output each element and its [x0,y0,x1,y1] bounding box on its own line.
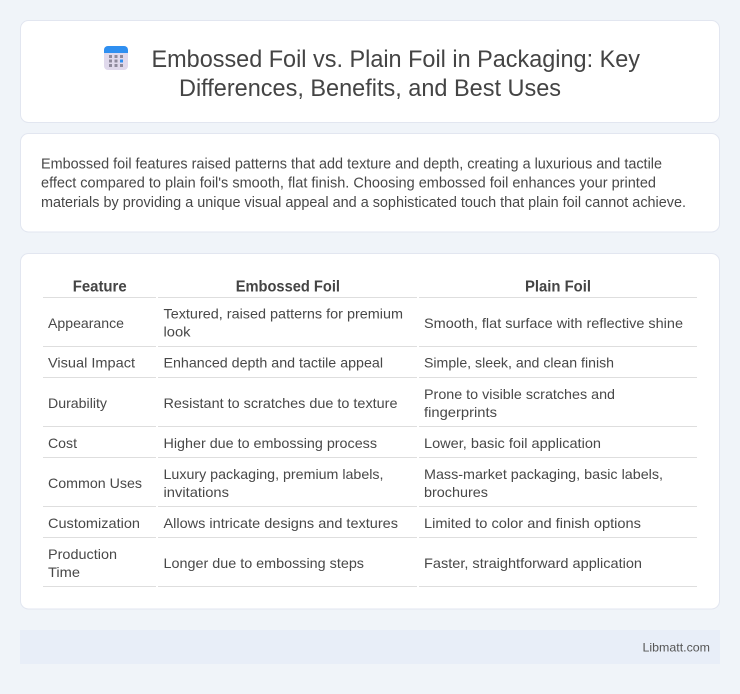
panel: comparison table [20,254,720,609]
row: common uses: invitations [164,484,229,500]
intro text: materials by providing a unique visual appeal and a sophisticated touch that plain foil cannot achieve. [41,195,686,211]
panel: introduction [20,134,720,232]
row: appearance: Appearance [48,315,124,331]
row: common uses: Luxury packaging, premium labels, [164,466,384,482]
row: common uses: Mass-market packaging, basic labels, [424,466,663,482]
row: production time: Time [48,564,80,580]
row: common uses: brochures [424,484,488,500]
row: cost [43,435,697,458]
row: customization: Allows intricate designs and textures [164,515,398,531]
panel: title card [20,20,720,122]
row: production time [43,546,697,587]
intro text [41,156,686,211]
row: appearance: look [164,324,192,340]
row: customization [43,515,697,538]
row: appearance: Textured, raised patterns for premium [164,306,403,322]
row: durability: fingerprints [424,404,497,420]
row: durability [43,386,697,427]
row: production time: Longer due to embossing steps [164,555,364,571]
footer [20,630,720,664]
row: production time: Production [48,546,117,562]
row: cost: Higher due to embossing process [164,435,377,451]
row: appearance: Smooth, flat surface with reflective shine [424,315,683,331]
intro text: Embossed foil features raised patterns that add texture and depth, creating a luxurious and tactile [41,156,662,172]
row: customization: Limited to color and finish options [424,515,641,531]
table header: Plain Foil [525,278,591,296]
footer: Libmatt.com [642,640,710,654]
row: visual impact: Enhanced depth and tactile appeal [164,354,383,370]
table header: Embossed Foil [236,278,340,296]
row: common uses [43,466,697,507]
row: cost: Cost [48,435,77,451]
table header: Feature [73,278,127,296]
table header [43,278,697,298]
row: visual impact [43,354,697,378]
intro text: effect compared to plain foil's smooth, flat finish. Choosing embossed foil enhances your printed [41,176,656,192]
title: Embossed Foil vs. Plain Foil in Packaging: Key [152,46,640,73]
row: customization: Customization [48,515,140,531]
icon: calendar [104,46,128,70]
row: visual impact: Simple, sleek, and clean finish [424,354,614,370]
row: production time: Faster, straightforward application [424,555,642,571]
row: cost: Lower, basic foil application [424,435,601,451]
title [152,46,640,102]
title: Differences, Benefits, and Best Uses [179,75,561,102]
row: durability: Prone to visible scratches and [424,386,615,402]
row: common uses: Common Uses [48,475,142,491]
row: durability: Durability [48,395,107,411]
row: appearance [43,306,697,347]
row: visual impact: Visual Impact [48,354,135,370]
row: durability: Resistant to scratches due to texture [164,395,398,411]
